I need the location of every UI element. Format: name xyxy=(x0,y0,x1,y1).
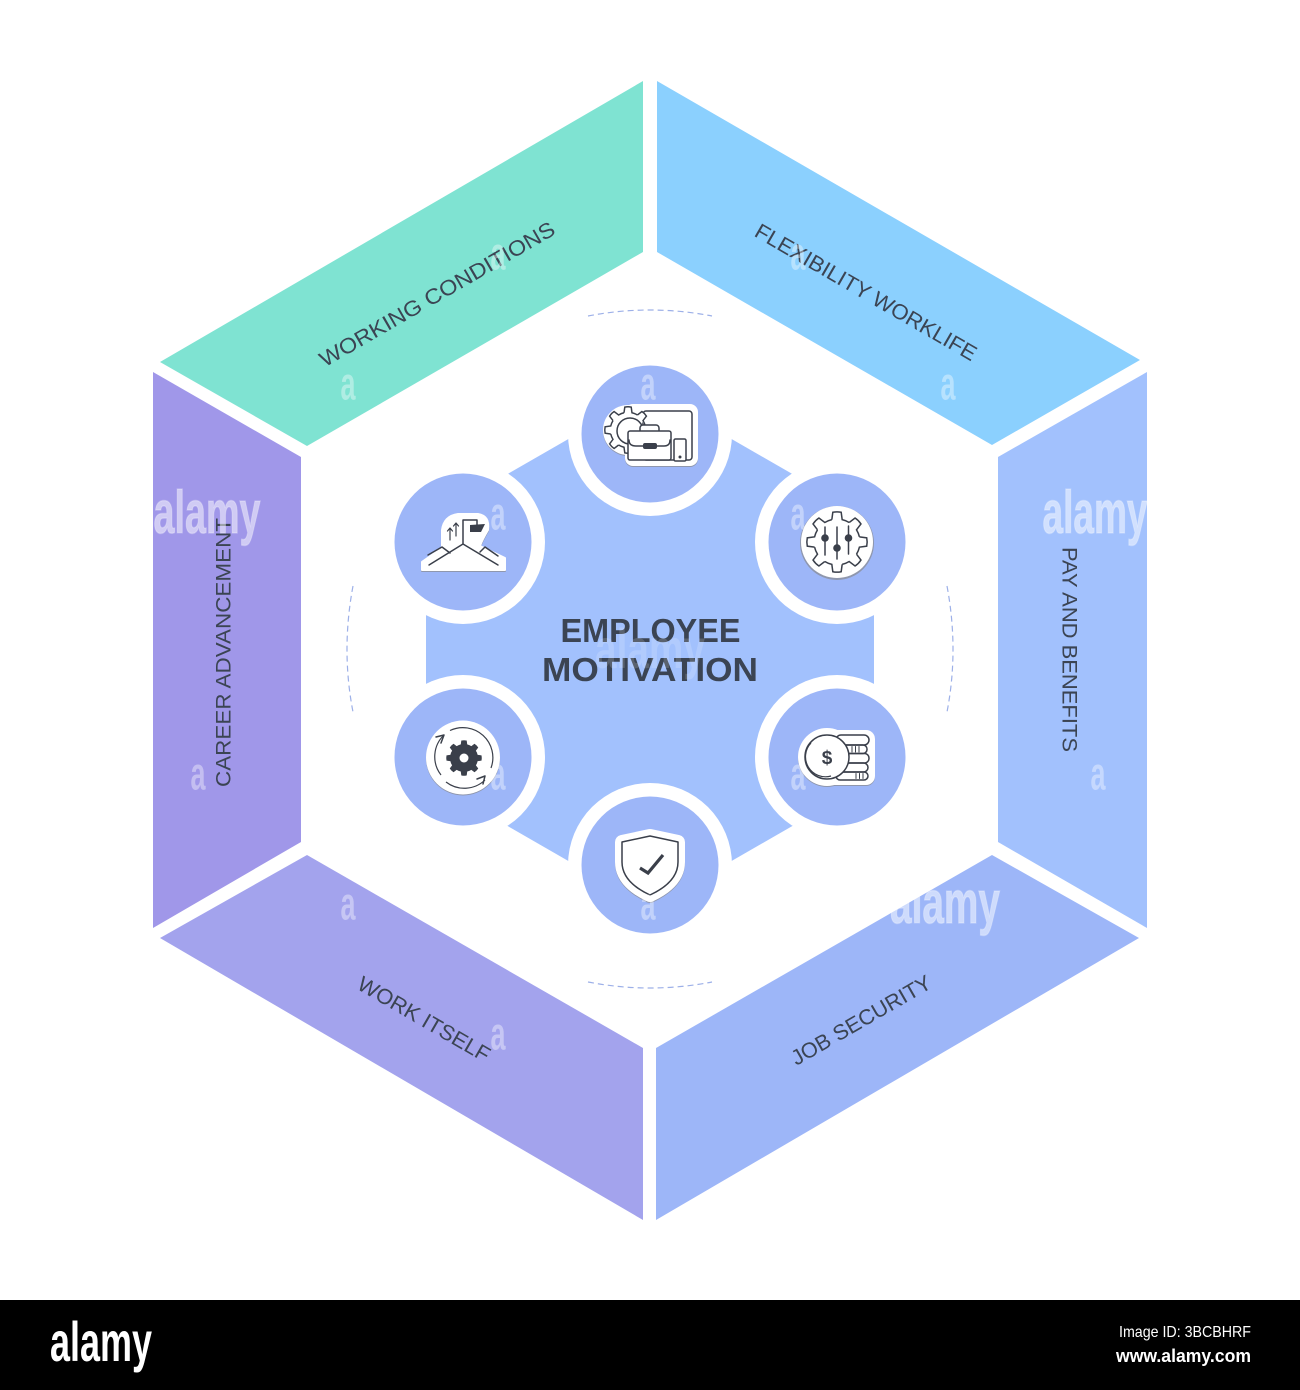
outer segment: working conditions xyxy=(160,81,643,446)
node: work itself icon xyxy=(381,675,545,839)
title: employee motivation xyxy=(542,612,758,688)
footer url: www.alamy.com xyxy=(1115,1346,1251,1366)
title: employee motivation: EMPLOYEE xyxy=(560,612,740,649)
watermark: a xyxy=(190,748,206,800)
outer segment: work itself xyxy=(160,855,643,1220)
outer segment: career advancement: CAREER ADVANCEMENT xyxy=(212,518,236,787)
outer segment: job security xyxy=(656,855,1139,1220)
outer segment: flexibility worklife xyxy=(657,81,1140,445)
icon: gear with rotation arrows xyxy=(426,720,500,796)
watermark xyxy=(154,228,1148,1060)
node: job security icon xyxy=(568,783,732,947)
watermark: a xyxy=(490,488,506,540)
icon: gear, briefcase and devices xyxy=(603,404,698,467)
icon: coin and stack: $ xyxy=(822,748,833,769)
watermark: a xyxy=(940,358,956,410)
watermark: a xyxy=(1090,748,1106,800)
node: career advancement icon xyxy=(381,460,545,624)
watermark: a xyxy=(640,878,656,930)
outer segment: pay and benefits xyxy=(998,372,1147,928)
watermark: alamy xyxy=(154,479,261,546)
watermark: a xyxy=(340,878,356,930)
watermark: alamy xyxy=(890,869,1000,936)
watermark: a xyxy=(790,228,806,280)
footer bar xyxy=(0,1300,1300,1390)
node: working conditions icon xyxy=(568,352,732,516)
watermark: a xyxy=(340,358,356,410)
outer segment: flexibility worklife: FLEXIBILITY WORKLIFE xyxy=(751,219,981,366)
icon: shield with check xyxy=(622,836,678,896)
outer segment: job security: JOB SECURITY xyxy=(787,971,936,1070)
icon: coin and stack xyxy=(798,728,875,787)
outer segment: working conditions: WORKING CONDITIONS xyxy=(315,217,559,372)
icon: mountain with flag xyxy=(422,514,505,571)
watermark: alamy xyxy=(1042,479,1148,546)
watermark: alamy xyxy=(595,617,705,680)
node: flexibility icon xyxy=(755,460,919,624)
footer logo: alamy xyxy=(50,1310,152,1373)
title: employee motivation: MOTIVATION xyxy=(542,651,758,688)
node: pay and benefits icon xyxy=(755,675,919,839)
outer segment: career advancement xyxy=(153,372,301,928)
watermark: a xyxy=(790,488,806,540)
icon: gear with sliders xyxy=(800,506,874,580)
watermark: a xyxy=(490,748,506,800)
watermark: a xyxy=(790,748,806,800)
watermark: a xyxy=(490,228,506,280)
watermark: a xyxy=(640,358,656,410)
footer image id: Image ID: 3BCBHRF xyxy=(1119,1324,1251,1341)
watermark: a xyxy=(490,1008,506,1060)
outer segment: pay and benefits: PAY AND BENEFITS xyxy=(1058,547,1082,752)
central hexagon xyxy=(426,392,874,908)
outer segment: work itself: WORK ITSELF xyxy=(353,972,494,1067)
